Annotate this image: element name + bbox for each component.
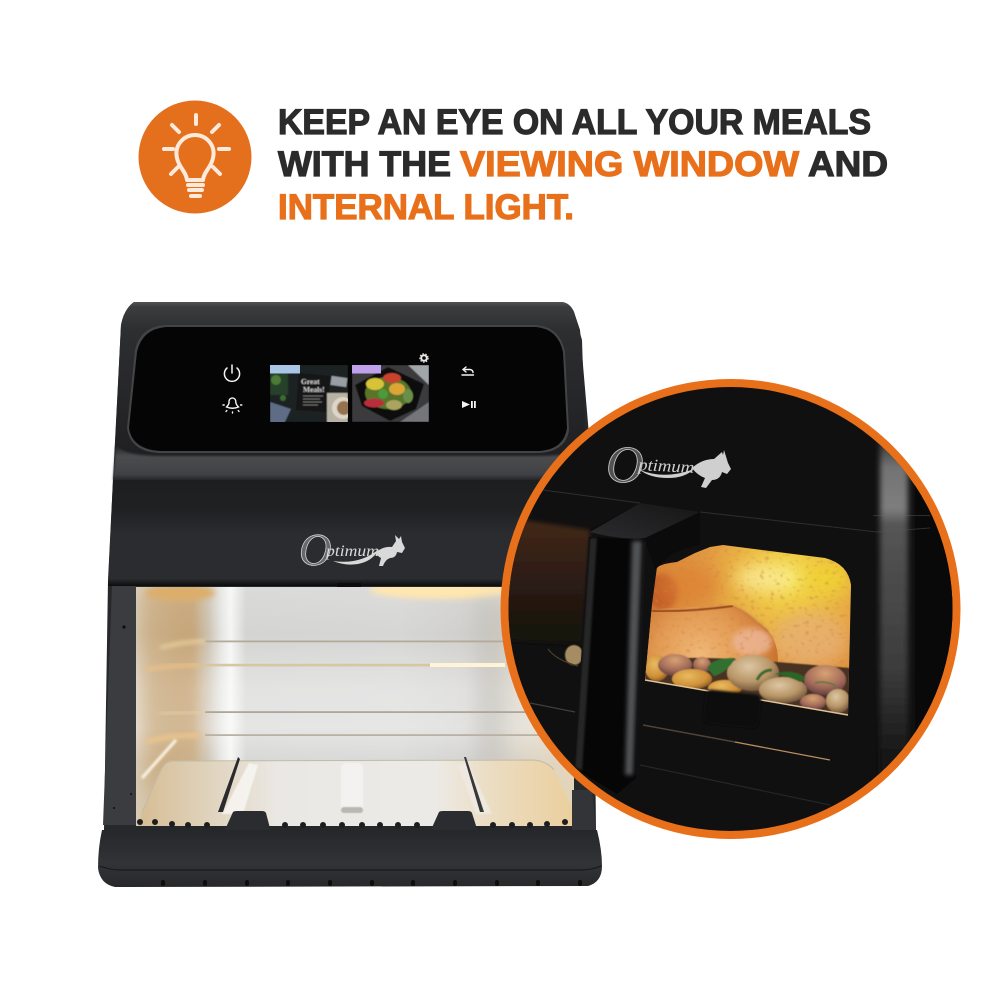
body seams [543,490,930,532]
viewing window [640,540,855,720]
air fryer [98,302,602,887]
rack feet [224,811,478,832]
zoomed brand logo: ptimum [637,455,695,477]
icon: back [462,367,474,375]
touch screen recipe tile: Great [301,377,320,386]
base [98,830,602,887]
title: KEEP AN EYE ON ALL YOUR MEALS [278,102,871,142]
base notches [161,880,582,886]
title: WITH THE [278,144,451,184]
rack rails [218,757,492,814]
title: AND [808,144,888,184]
panel lip [113,446,590,480]
fryer body [104,302,596,830]
control panel [127,325,569,453]
interior rails [146,640,545,742]
touch screen recipe tile [270,365,348,422]
icon: settings gear [420,354,428,362]
tray handle recess [706,688,763,724]
vertical highlight strip [880,410,908,790]
icon: light bell [223,398,242,413]
frame screws [113,625,132,809]
top cap [114,302,586,465]
oven interior [136,581,576,830]
brand logo: O [299,525,332,575]
right side [572,790,596,830]
zoomed brand logo [606,437,731,494]
orange ring [500,379,960,839]
touch screen recipe tile: Meals! [303,385,325,394]
icon: light bulb badge [138,100,252,214]
door light line [643,725,735,742]
zoomed brand logo: O [606,437,644,494]
stud rail [136,826,576,830]
brand logo [299,525,405,575]
fryer door handle [574,537,644,794]
title: INTERNAL LIGHT. [278,187,574,227]
studs [137,819,568,828]
brand band [108,480,594,586]
fryer door handle top [590,529,659,568]
touch screen food tile [352,365,429,422]
potatoes [645,654,850,716]
door clips [337,583,361,588]
oven floor [138,760,574,830]
window bottom edge [645,680,848,715]
title: VIEWING WINDOW [460,144,800,184]
icon: power [224,365,240,381]
icon: play pause [462,401,476,408]
left door frame [103,586,136,825]
left interior glimpse [530,645,583,712]
zoom circle callout [500,378,965,843]
brand logo: ptimum [325,543,379,560]
turkey leg [645,606,778,680]
left oven opening [505,517,590,645]
title [278,102,888,227]
